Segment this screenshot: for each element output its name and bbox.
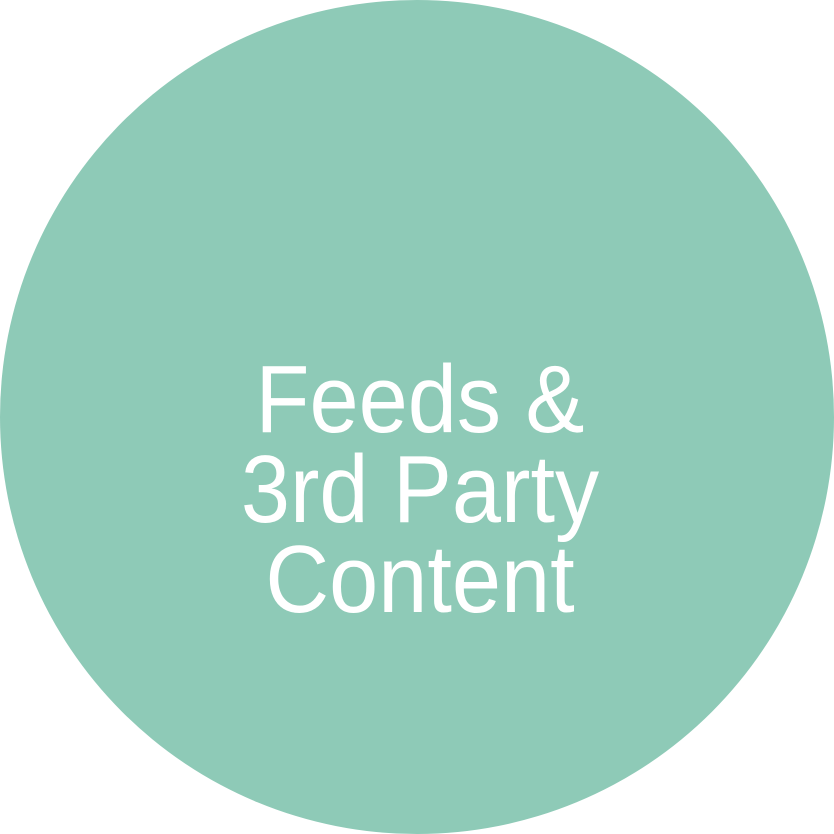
title text: Content: [265, 526, 575, 633]
title text: Feeds &: [256, 346, 584, 453]
title text: 3rd Party: [241, 436, 599, 543]
